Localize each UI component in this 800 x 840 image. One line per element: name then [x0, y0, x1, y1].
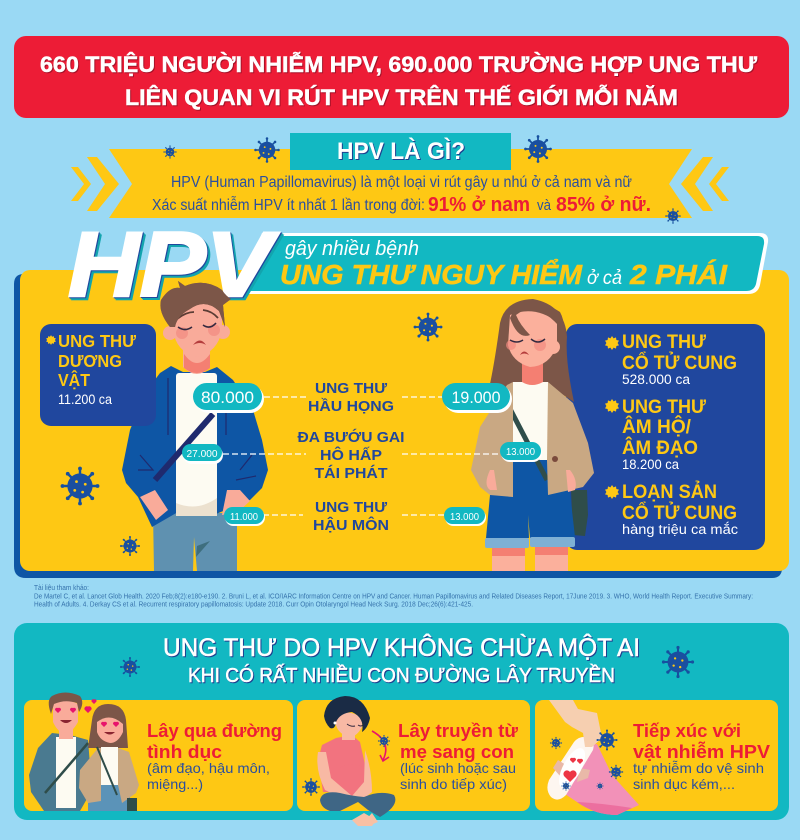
heading: HPV là gì: HPV LÀ GÌ?	[337, 137, 465, 165]
label: ung thư hầu họng	[308, 381, 394, 415]
panel: female cancer box: hàng triệu ca mắc	[622, 522, 738, 537]
illustration: hand holding pad and underwear	[547, 700, 639, 815]
panel: female cancer box: ÂM HỘ/	[622, 414, 692, 438]
value pill: female 13.000 upper	[500, 442, 542, 462]
value pill: male 11.000	[224, 507, 265, 526]
illustration: man hair over headline	[160, 281, 231, 327]
label: ung thư hầu họng: UNG THƯ	[315, 381, 388, 397]
value pill: female 19.000: 19.000	[452, 388, 500, 407]
chart: dashed connectors	[223, 397, 500, 515]
panel: female cancer box: ÂM ĐẠO	[622, 435, 698, 459]
text: mother to child: Lây truyền từ	[398, 720, 519, 741]
text: references	[34, 583, 753, 608]
banner: HPV headline strip	[238, 233, 768, 294]
value pill: female 13.000 lower	[444, 507, 486, 526]
text: sexual transmission: (âm đạo, hậu môn,	[147, 760, 270, 776]
heading: transmission title: KHI CÓ RẤT NHIỀU CON ĐƯỜNG LÂY TRUYỀN	[188, 664, 615, 687]
text: contaminated objects: vật nhiễm HPV	[633, 741, 771, 762]
text: sexual transmission: Lây qua đường	[147, 720, 282, 741]
icon: viruses mother card	[302, 735, 390, 796]
banner: HPV headline strip: gây nhiều bệnh	[285, 238, 419, 260]
icon: viruses in main panel	[61, 313, 442, 556]
panel: female cancer box: LOẠN SẢN	[622, 480, 717, 503]
value pill: male 11.000: 11.000	[230, 512, 258, 523]
value pill: male 80.000	[193, 383, 264, 413]
banner: HPV headline strip: 2 PHÁI	[629, 259, 728, 290]
text: definition: HPV (Human Papillomavirus) là một loại vi rút gây u nhú ở cả nam và nữ	[171, 174, 632, 191]
panel: female cancer box: 528.000 ca	[622, 372, 690, 387]
value pill: male 80.000: 80.000	[201, 388, 254, 407]
text: contaminated objects	[633, 720, 771, 792]
panel: female cancer box: UNG THƯ	[622, 331, 707, 353]
heading: HPV là gì	[290, 133, 511, 170]
panel: HPV definition ribbon	[71, 133, 729, 218]
label: ung thư hậu môn	[313, 500, 389, 534]
text: sexual transmission: miệng...)	[147, 776, 203, 792]
panel: female cancer box	[566, 324, 765, 550]
text: probability: 91% ở nam	[428, 194, 530, 216]
label: ung thư hậu môn: HẬU MÔN	[313, 516, 389, 534]
illustration: pregnant woman	[317, 696, 395, 826]
panel: male cancer box	[40, 324, 156, 426]
text: probability: Xác suất nhiễm HPV ít nhất 1 lần trong đời:	[152, 197, 425, 214]
banner: HPV headline strip: ở cả	[587, 268, 622, 289]
card: mother to child	[297, 696, 530, 826]
icon: viruses object card	[550, 729, 623, 791]
text: probability	[152, 194, 651, 216]
text: mother to child: (lúc sinh hoặc sau	[400, 760, 516, 776]
label: đa bướu gai hô hấp tái phát: HÔ HẤP	[320, 446, 382, 464]
value pill: female 13.000 upper: 13.000	[506, 447, 535, 458]
value pill: male 27.000	[182, 444, 223, 464]
heading: transmission title	[163, 633, 640, 687]
text: contaminated objects: tự nhiễm do vệ sinh	[633, 760, 764, 776]
card: sexual transmission	[24, 692, 293, 811]
heading: transmission title: UNG THƯ DO HPV KHÔNG CHỪA MỘT AI	[163, 633, 640, 662]
headline: HPV big: HPV	[68, 214, 279, 316]
text: mother to child	[398, 720, 519, 792]
text: references: Tài liệu tham khảo:	[34, 583, 89, 592]
text: references: Health of Adults. 4. Derkay CS et al. Recurrent respiratory papillomatosis: Update 2018. Curr Opin Otolaryngol Head Neck Surg. 2018 Dec;26(6):421-425.	[34, 600, 473, 608]
panel: male cancer box: DƯƠNG	[58, 351, 122, 371]
arrow: mother to child	[372, 731, 389, 761]
title banner: 660 TRIỆU NGƯỜI NHIỄM HPV, 690.000 TRƯỜNG HỢP UNG THƯ	[40, 51, 757, 77]
value pill: female 19.000	[442, 383, 512, 413]
illustration: man	[122, 281, 268, 571]
text: sexual transmission: tình dục	[147, 741, 222, 762]
title banner	[14, 36, 789, 118]
label: đa bướu gai hô hấp tái phát: TÁI PHÁT	[314, 465, 388, 482]
label: đa bướu gai hô hấp tái phát	[298, 428, 404, 482]
banner: HPV headline strip: UNG THƯ NGUY HIỂM	[280, 259, 583, 290]
label: đa bướu gai hô hấp tái phát: ĐA BƯỚU GAI	[298, 428, 404, 446]
card: contaminated objects	[535, 700, 778, 815]
illustration: couple	[29, 692, 139, 811]
panel: female cancer box: CỔ TỬ CUNG	[622, 350, 737, 374]
icon: virus row top	[163, 135, 681, 224]
text: probability: 85% ở nữ.	[556, 194, 651, 216]
text: probability: và	[537, 197, 552, 214]
text: mother to child: mẹ sang con	[400, 741, 514, 762]
panel: female cancer box: CỔ TỬ CUNG	[622, 500, 737, 524]
panel: transmission routes	[14, 623, 789, 820]
icon: viruses in title	[120, 646, 694, 678]
label: ung thư hầu họng: HẦU HỌNG	[308, 398, 394, 415]
panel: female cancer box: 18.200 ca	[622, 457, 679, 472]
label: ung thư hậu môn: UNG THƯ	[315, 500, 388, 516]
panel: male cancer box: UNG THƯ	[58, 331, 136, 351]
panel: male cancer box: 11.200 ca	[58, 392, 112, 407]
panel: male cancer box: VẬT	[58, 369, 90, 390]
text: contaminated objects: sinh dục kém,...	[633, 776, 735, 792]
panel: female cancer box: UNG THƯ	[622, 396, 707, 418]
value pill: male 27.000: 27.000	[186, 449, 218, 460]
text: mother to child: sinh do tiếp xúc)	[400, 776, 507, 792]
value pill: female 13.000 lower: 13.000	[450, 512, 479, 523]
illustration: woman	[471, 299, 594, 571]
panel: cancers by sex	[14, 270, 789, 578]
text: contaminated objects: Tiếp xúc với	[633, 720, 741, 741]
text: sexual transmission	[147, 720, 282, 792]
title banner: LIÊN QUAN VI RÚT HPV TRÊN THẾ GIỚI MỖI NĂM	[125, 84, 678, 110]
